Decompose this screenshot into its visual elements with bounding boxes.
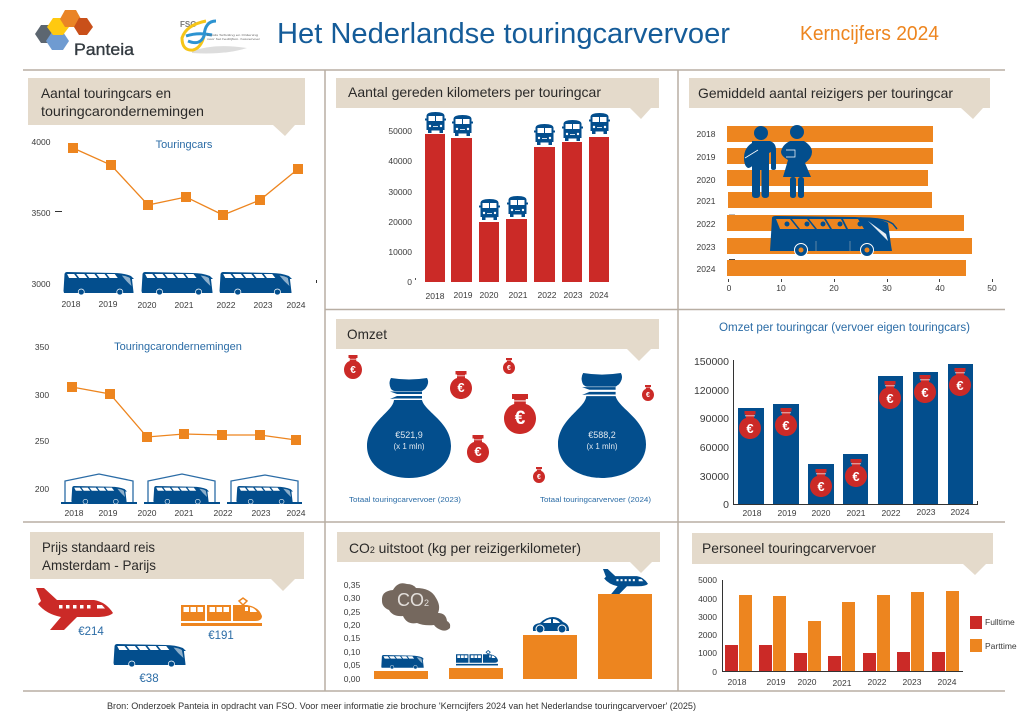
horizontal bar chart: reizigers: 10 (776, 283, 786, 293)
bar chart: kilometers: 2022 (538, 290, 557, 300)
bar chart: kilometers: 10000 (388, 247, 412, 257)
icon: CO2 cloud (382, 583, 450, 631)
horizontal bar chart: reizigers: 2023 (697, 242, 716, 252)
bar chart: personeel: 1000 (698, 648, 717, 658)
line chart: touringcars: 3500 (32, 208, 51, 218)
horizontal bar chart: reizigers: 2018 (697, 129, 716, 139)
heading: Amsterdam - Parijs (42, 557, 156, 573)
line chart: touringcarondernemingen: 2019 (99, 508, 118, 518)
bar chart: kilometers: 2023 (564, 290, 583, 300)
panel: omzet (336, 319, 659, 504)
bar chart: personeel: 0 (712, 667, 717, 677)
horizontal bar chart: reizigers: 2022 (697, 219, 716, 229)
bar chart: omzet per touringcar: 120000 (694, 385, 729, 397)
bar chart: personeel: 2024 (938, 677, 957, 687)
line chart: touringcarondernemingen: 2022 (214, 508, 233, 518)
icon: money bag 2023 (367, 378, 451, 478)
line chart: touringcars: 2024 (287, 300, 306, 310)
bar chart: omzet per touringcar: 150000 (694, 356, 729, 368)
panel: omzet per touringcar (694, 322, 978, 518)
bar chart: personeel: 2018 (728, 677, 747, 687)
icon: woman (781, 125, 812, 198)
icon: train (456, 651, 498, 665)
bar chart: kilometers: 2021 (509, 290, 528, 300)
bar chart: omzet per touringcar: 2019 (778, 508, 797, 518)
heading (337, 532, 660, 573)
bar chart: kilometers (388, 112, 610, 301)
horizontal bar chart: reizigers: 30 (882, 283, 892, 293)
line chart: touringcars: 2019 (99, 299, 118, 309)
line chart: touringcars (32, 137, 317, 310)
logo: Panteia: Panteia (74, 40, 135, 59)
bar chart: omzet per touringcar: € (817, 479, 825, 494)
line chart: touringcarondernemingen: Touringcarondernemingen (114, 341, 242, 353)
bar chart: omzet per touringcar: 2023 (917, 507, 936, 517)
bar chart: omzet per touringcar: 2024 (951, 507, 970, 517)
legend (970, 616, 1017, 652)
icon: man (744, 126, 776, 198)
bar chart: omzet per touringcar: 2020 (812, 508, 831, 518)
bar chart: omzet per touringcar: 0 (723, 499, 729, 511)
bar chart: CO2 (344, 580, 652, 684)
heading: CO2 uitstoot (kg per reizigerkilometer) (349, 540, 581, 556)
horizontal bar chart: reizigers: 0 (727, 283, 732, 293)
icon: coach (381, 655, 424, 669)
icons: scattered euro bags: € (350, 365, 356, 376)
bar chart: CO2: 0,10 (344, 647, 361, 657)
bar chart: kilometers: 0 (407, 277, 412, 287)
line chart: touringcarondernemingen: 200 (35, 484, 49, 494)
bar chart: kilometers: 2018 (426, 291, 445, 301)
heading: touringcarondernemingen (41, 103, 204, 119)
heading: Gemiddeld aantal reizigers per touringcar (698, 85, 953, 101)
icon: plane with price (36, 588, 113, 638)
bar chart: personeel: 2023 (903, 677, 922, 687)
panel: aantal touringcars en ondernemingen (28, 78, 317, 518)
icon: coach with price (114, 644, 186, 685)
icons: scattered euro bags (344, 355, 654, 483)
heading: Aantal gereden kilometers per touringcar (348, 84, 601, 100)
line chart: touringcars: 3000 (32, 279, 51, 289)
logo: FSO: voor het bedrijfsm. busvervoer (207, 37, 260, 41)
bar chart: personeel (698, 575, 963, 688)
icon: train with price (181, 598, 262, 642)
line chart: touringcars: 2021 (175, 300, 194, 310)
icons: scattered euro bags: € (646, 392, 650, 399)
bar chart: CO2: 0,15 (344, 633, 361, 643)
bar chart: omzet per touringcar: 2021 (847, 508, 866, 518)
bar chart: CO2: 0,00 (344, 674, 361, 684)
icon: money bag 2024: (x 1 mln) (586, 442, 618, 451)
bar chart: CO2: 0,25 (344, 607, 361, 617)
bar chart: personeel: 2021 (833, 678, 852, 688)
bar chart: kilometers: 2024 (590, 290, 609, 300)
horizontal bar chart: reizigers: 2019 (697, 152, 716, 162)
icons: scattered euro bags: € (474, 444, 482, 459)
logo: FSO: FSO (180, 20, 196, 29)
bar chart: omzet per touringcar: € (921, 385, 929, 400)
icon: money bag 2024 (558, 373, 646, 478)
line chart: touringcarondernemingen: 2018 (65, 508, 84, 518)
line chart: touringcarondernemingen: 2023 (252, 508, 271, 518)
bar chart: omzet per touringcar: € (956, 378, 964, 393)
heading: Prijs standaard reis (42, 539, 155, 555)
horizontal bar chart: reizigers: 2024 (697, 264, 716, 274)
heading: Omzet (347, 326, 387, 342)
icons: scattered euro bags: € (457, 380, 465, 395)
panel: personeel (692, 533, 1017, 688)
bar chart: personeel: 2000 (698, 630, 717, 640)
line chart: touringcars: 2020 (138, 300, 157, 310)
bar chart: CO2: 0,20 (344, 620, 361, 630)
bar chart: kilometers: 40000 (388, 156, 412, 166)
icon: coach with price: €38 (139, 673, 159, 685)
bar chart: CO2: 0,30 (344, 593, 361, 603)
bar chart: personeel: 4000 (698, 594, 717, 604)
bar chart: omzet per touringcar (694, 356, 978, 518)
horizontal bar chart: reizigers (697, 126, 997, 293)
horizontal bar chart: reizigers: 2021 (697, 196, 716, 206)
heading: Omzet per touringcar (vervoer eigen touringcars) (719, 322, 970, 334)
bar chart: omzet per touringcar: € (746, 421, 754, 436)
horizontal bar chart: reizigers: 50 (987, 283, 997, 293)
bar chart: omzet per touringcar: € (782, 418, 790, 433)
bar chart: omzet per touringcar: € (886, 391, 894, 406)
line chart: touringcarondernemingen (35, 341, 306, 518)
heading (336, 319, 659, 361)
line chart: touringcarondernemingen: 250 (35, 436, 49, 446)
icon: large coach (770, 216, 897, 256)
icon: train with price: €191 (208, 630, 234, 642)
bar chart: CO2: 0,05 (344, 660, 361, 670)
legend: Parttime (985, 641, 1017, 651)
panel: kilometers per touringcar (336, 78, 659, 301)
bar chart: omzet per touringcar: € (852, 469, 860, 484)
line chart: touringcarondernemingen: 350 (35, 342, 49, 352)
icon: car (533, 617, 569, 633)
icon: money bag 2024: €588,2 (588, 430, 616, 440)
heading (336, 78, 659, 119)
bar chart: CO2: 0,35 (344, 580, 361, 590)
bar chart: kilometers: 30000 (388, 187, 412, 197)
heading: Personeel touringcarvervoer (702, 540, 876, 556)
line chart: touringcarondernemingen: 300 (35, 390, 49, 400)
icon: plane (603, 569, 648, 594)
bar chart: kilometers: 2020 (480, 290, 499, 300)
bar chart: omzet per touringcar: 2022 (882, 508, 901, 518)
bar chart: personeel: 2022 (868, 677, 887, 687)
bar chart: omzet per touringcar: 30000 (700, 471, 729, 483)
bar chart: kilometers: 50000 (388, 126, 412, 136)
line chart: touringcars: 4000 (32, 137, 51, 147)
heading (689, 78, 990, 119)
horizontal bar chart: reizigers: 40 (935, 283, 945, 293)
line chart: touringcars: 2018 (62, 299, 81, 309)
subtitle: Kerncijfers 2024: Kerncijfers 2024 (800, 23, 939, 45)
logo: FSO: Fonds Scholing en Ordening (207, 33, 259, 37)
icons: scattered euro bags: € (507, 365, 511, 372)
icons: scattered euro bags: € (515, 408, 526, 429)
bar chart: omzet per touringcar: 60000 (700, 442, 729, 454)
heading: Aantal touringcars en (41, 85, 171, 101)
bar chart: omzet per touringcar: 2018 (743, 508, 762, 518)
horizontal bar chart: reizigers: 20 (829, 283, 839, 293)
icon: money bag 2023: €521,9 (395, 430, 423, 440)
bar chart: personeel: 3000 (698, 612, 717, 622)
line chart: touringcarondernemingen: 2020 (138, 508, 157, 518)
line chart: touringcarondernemingen: 2021 (175, 508, 194, 518)
horizontal bar chart: reizigers: 2020 (697, 175, 716, 185)
panel: reizigers per touringcar (689, 78, 997, 293)
heading (28, 78, 305, 136)
bar chart: kilometers: 2019 (454, 290, 473, 300)
icon: plane with price: €214 (78, 626, 104, 638)
line chart: touringcars: 2022 (217, 300, 236, 310)
source note: Bron: Onderzoek Panteia in opdracht van FSO. Voor meer informatie zie brochure 'Kerncijfers 2024 van het Nederlandse touringcarvervoer' (2025) (107, 701, 696, 711)
heading (692, 533, 993, 575)
bar chart: personeel: 2019 (767, 677, 786, 687)
label: totaal 2024: Totaal touringcarvervoer (2024) (540, 495, 652, 504)
bar chart: omzet per touringcar: 90000 (700, 413, 729, 425)
icons: scattered euro bags: € (537, 474, 541, 481)
panel: prijs standaard reis (30, 532, 304, 685)
icon: money bag 2023: (x 1 mln) (393, 442, 425, 451)
title: Het Nederlandse touringcarvervoer (277, 18, 730, 50)
logo: Panteia (35, 10, 135, 59)
logo: FSO (180, 20, 260, 53)
bar chart: personeel: 5000 (698, 575, 717, 585)
icon: CO2 cloud: CO2 (397, 590, 429, 610)
line chart: touringcarondernemingen: 2024 (287, 508, 306, 518)
legend: Fulltime (985, 617, 1015, 627)
panel: CO2 uitstoot (337, 532, 660, 684)
label: totaal 2023: Totaal touringcarvervoer (2023) (349, 495, 462, 504)
line chart: touringcars: 2023 (254, 300, 273, 310)
line chart: touringcars: Touringcars (156, 139, 213, 151)
bar chart: kilometers: 20000 (388, 217, 412, 227)
bar chart: personeel: 2020 (798, 677, 817, 687)
heading (30, 532, 304, 591)
